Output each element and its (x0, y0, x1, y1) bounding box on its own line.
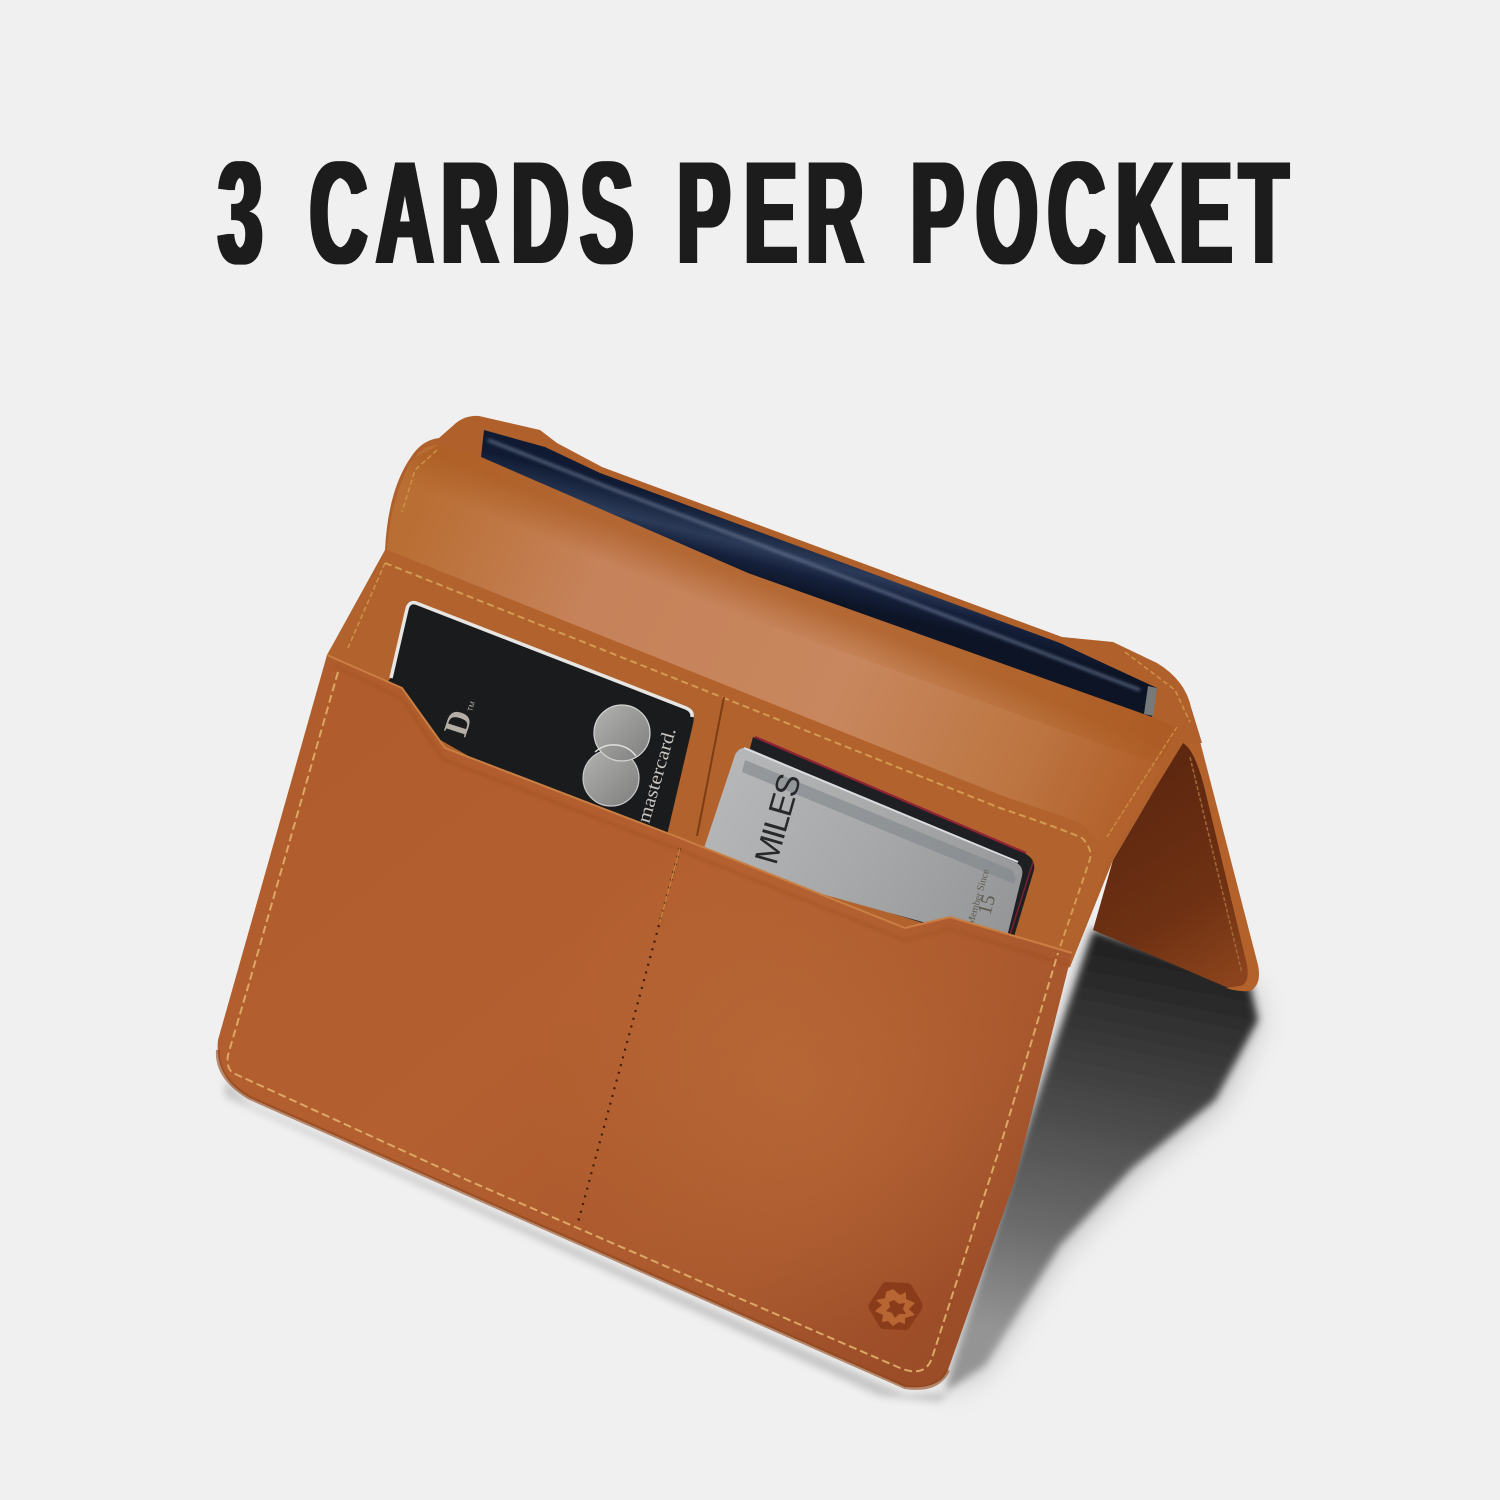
wallet (218, 416, 1259, 1388)
trademark: TM (467, 701, 477, 713)
card network circles (583, 705, 650, 806)
silver card stack (700, 737, 1034, 950)
card name: MILES (747, 769, 808, 868)
year: 15 (974, 892, 1000, 917)
black card (370, 601, 694, 865)
centre stitching (577, 848, 680, 1226)
network name: mastercard. (634, 725, 681, 825)
member since: Member Since (965, 868, 992, 927)
flap stitching (402, 450, 1190, 722)
band with pocket stitching (327, 550, 1108, 1000)
back panel, dark inner side (1093, 725, 1259, 991)
cast shadow (225, 930, 1262, 1402)
card mark D: D (437, 706, 480, 740)
title: 3 CARDS PER POCKET (218, 131, 1288, 294)
upper leather body (327, 416, 1202, 1000)
pocket stitching and centre seam (347, 563, 1177, 953)
light top surface (387, 445, 1178, 860)
front pocket panel (218, 655, 1072, 1388)
perimeter stitching (228, 672, 1058, 1371)
passport spine, navy (481, 430, 1157, 717)
maker's mark emboss (868, 1282, 922, 1330)
